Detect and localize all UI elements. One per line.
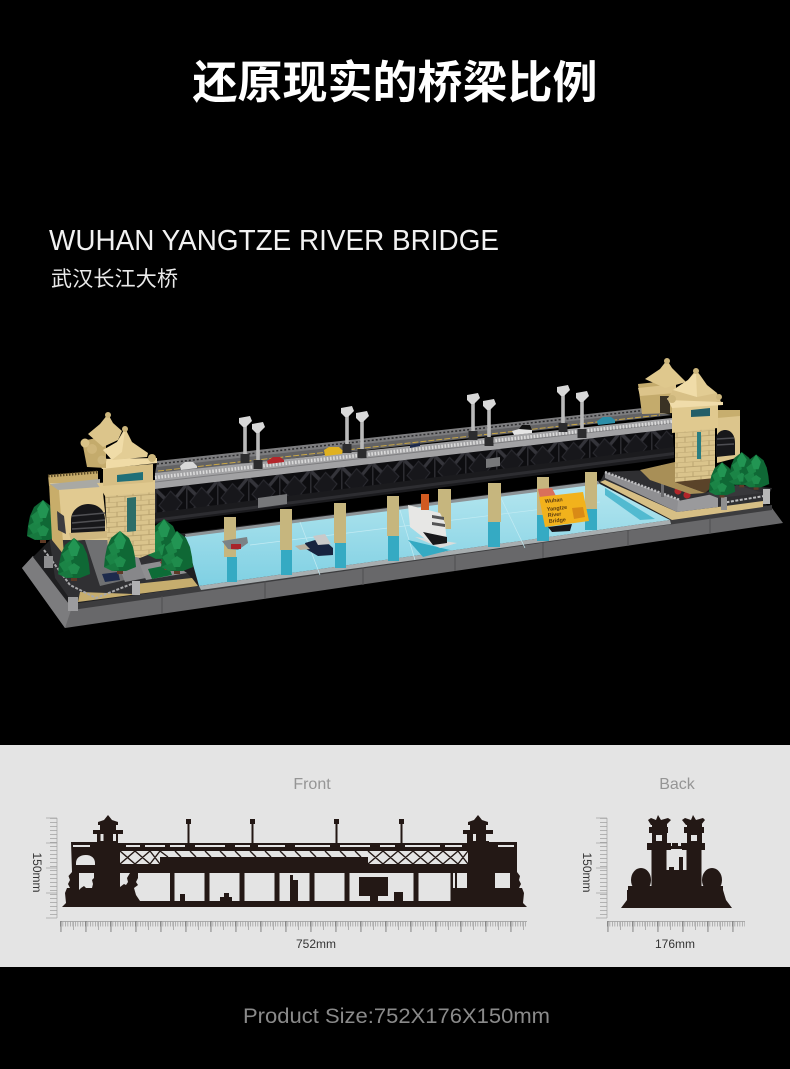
bridge model illustration bbox=[22, 358, 783, 628]
back tower block bbox=[82, 436, 106, 468]
model base plate bbox=[22, 480, 783, 628]
front vertical ruler bbox=[46, 818, 57, 918]
yellow info sign: Bridge bbox=[549, 517, 566, 525]
back silhouette bbox=[621, 815, 732, 908]
chinese subheading: 武汉长江大桥 bbox=[51, 268, 178, 291]
bridge piers bbox=[224, 472, 597, 557]
right wing bbox=[717, 410, 740, 463]
vehicles on deck bbox=[180, 417, 615, 470]
yellow info sign: Wuhan bbox=[545, 497, 563, 505]
brick shaft bbox=[640, 462, 705, 494]
right trees bbox=[709, 452, 769, 498]
left bank bbox=[44, 528, 198, 611]
lattice crosses bbox=[120, 851, 468, 864]
front height label: 150mm bbox=[30, 852, 44, 893]
right bank bbox=[600, 465, 772, 520]
back height label: 150mm bbox=[580, 852, 594, 893]
boats bbox=[222, 488, 556, 556]
left front trees bbox=[58, 531, 136, 581]
back label: Back bbox=[659, 776, 696, 793]
dimension panel bbox=[0, 745, 790, 967]
yellow info sign: Yangtze bbox=[547, 505, 567, 513]
left trees bbox=[27, 500, 193, 574]
yellow info sign: River bbox=[548, 512, 563, 519]
back width label: 176mm bbox=[655, 937, 695, 951]
english heading: WUHAN YANGTZE RIVER BRIDGE bbox=[49, 225, 499, 257]
street lamps bbox=[239, 385, 589, 469]
title: 还原现实的桥梁比例 bbox=[192, 57, 598, 108]
silhouette lamps, sign and boats bbox=[186, 819, 404, 843]
left tower gate bbox=[48, 412, 157, 558]
back horizontal ruler bbox=[607, 922, 745, 926]
front width label: 752mm bbox=[296, 937, 336, 951]
front horizontal ruler bbox=[60, 922, 527, 926]
yellow info sign bbox=[539, 492, 589, 532]
bridge road deck bbox=[155, 408, 672, 489]
wing rail and wall bbox=[48, 471, 98, 486]
right tower gate bbox=[638, 358, 740, 494]
back tower body bbox=[638, 380, 676, 414]
back roof bbox=[645, 360, 686, 388]
back vertical ruler bbox=[596, 818, 607, 918]
bridge truss bbox=[153, 428, 674, 524]
river water bbox=[185, 481, 671, 590]
product size caption: Product Size:752X176X150mm bbox=[243, 1005, 550, 1028]
tower brick shaft bbox=[105, 489, 155, 558]
front roof bbox=[673, 370, 717, 397]
front roof bbox=[103, 428, 148, 460]
front silhouette bbox=[62, 815, 527, 907]
back roof bbox=[88, 414, 122, 447]
front label: Front bbox=[293, 776, 331, 793]
